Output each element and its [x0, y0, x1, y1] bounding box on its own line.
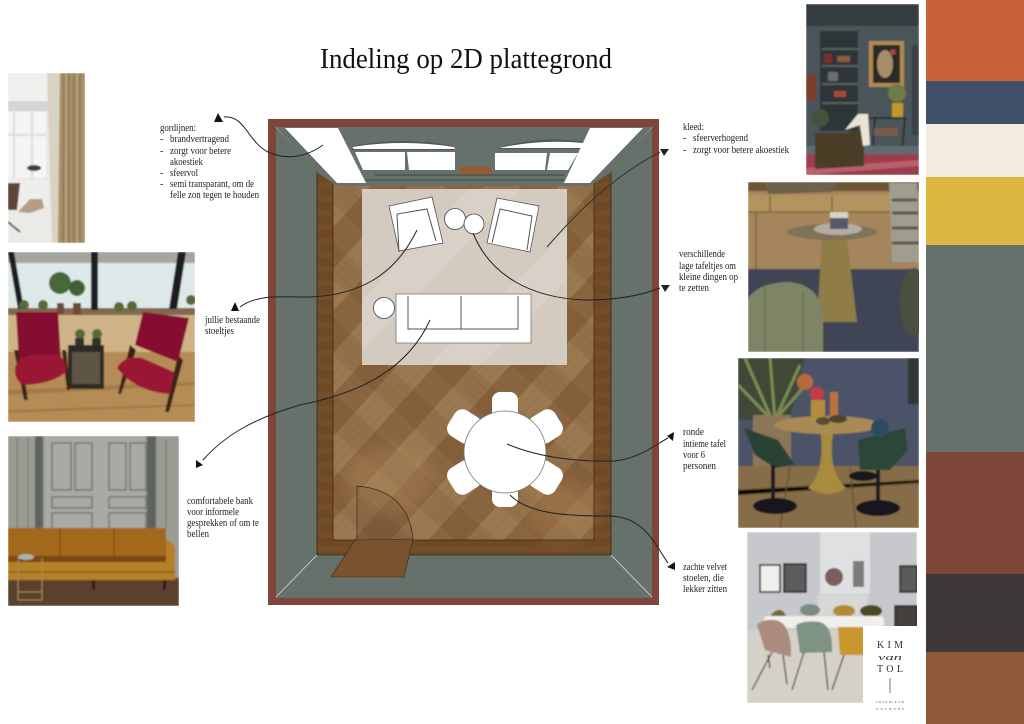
text: dining table: voor 6 — [683, 450, 705, 461]
rug — [362, 189, 567, 365]
logo: Kim van Tol: ONTWERP — [876, 707, 904, 711]
logo: Kim van Tol: INTERIEUR — [876, 700, 905, 704]
text: low tables: kleine dingen op — [679, 272, 738, 283]
arrow: rug — [547, 149, 669, 247]
arrow: velvet chairs — [510, 495, 675, 570]
text: low tables: te zetten — [679, 283, 709, 294]
text: curtains: zorgt voor betere — [170, 146, 231, 157]
door threshold — [331, 539, 413, 577]
logo: Kim van Tol: van — [878, 653, 902, 662]
title: Indeling op 2D plattegrond — [320, 43, 612, 75]
text: curtains: - — [160, 168, 163, 179]
text: dining table: intieme tafel — [683, 439, 726, 450]
text: armchairs — [204, 315, 260, 337]
text: dining table — [683, 427, 726, 472]
floor plan — [268, 119, 659, 605]
text: curtains: sfeervol — [170, 168, 198, 179]
text: low tables — [679, 249, 738, 294]
text: curtains — [160, 123, 259, 201]
text: curtains: - — [160, 134, 163, 145]
arrow: low tables — [473, 233, 670, 300]
logo: Kim van Tol: KIM — [877, 640, 903, 651]
text: velvet chairs: stoelen, die — [683, 573, 725, 584]
text: rug: kleed: — [683, 122, 704, 133]
walls — [276, 127, 652, 598]
curtain right — [564, 128, 643, 183]
text: rug: - — [683, 145, 686, 156]
photo: red armchairs — [8, 252, 195, 422]
text: low tables: lage tafeltjes om — [679, 261, 736, 272]
room outer wall border — [268, 119, 659, 605]
logo: Kim van Tol: TOL — [877, 664, 903, 675]
text: rug: - — [683, 133, 686, 144]
text: sofa: gesprekken of om te — [187, 518, 259, 529]
photo: side table — [748, 182, 919, 352]
text: curtains: - — [160, 179, 163, 190]
text: curtains: brandvertragend — [170, 134, 229, 145]
text: rug: sfeerverhogend — [693, 133, 748, 144]
arrow: curtains — [214, 113, 323, 157]
photo: curtains — [8, 73, 85, 243]
text: velvet chairs — [683, 562, 727, 595]
dining table with six chairs — [444, 392, 566, 507]
text: sofa: comfortabele bank — [187, 496, 253, 507]
sofa — [396, 294, 531, 343]
text: sofa: voor informele — [187, 507, 239, 518]
text: curtains: gordijnen: — [160, 123, 196, 134]
side tables — [374, 208, 484, 318]
wood floor with baseboards — [317, 168, 611, 555]
text: sofa — [187, 496, 259, 540]
panel: colour palette — [926, 0, 1024, 724]
text: curtains: - — [160, 146, 163, 157]
text: curtains: felle zon tegen te houden — [170, 190, 259, 201]
arrow: armchairs — [231, 230, 417, 311]
text: low tables: verschillende — [679, 249, 725, 260]
armchair left — [389, 197, 443, 252]
text: curtains: akoestiek — [170, 157, 203, 168]
door swing — [357, 486, 413, 540]
photo: velvet dining chairs — [747, 532, 917, 703]
curtain left — [285, 128, 366, 183]
back wall with windows — [276, 127, 652, 186]
photo: velvet sofa — [8, 436, 179, 606]
text: dining table: personen — [683, 461, 716, 472]
text: curtains: semi transparant, om de — [170, 179, 254, 190]
wall corner lines — [276, 127, 652, 597]
text: velvet chairs: zachte velvet — [683, 562, 727, 573]
text: armchairs: stoeltjes — [205, 326, 234, 337]
photo: round dining table — [738, 358, 919, 528]
armchair right — [487, 198, 539, 252]
arrow: dining table — [507, 432, 674, 461]
logo: Kim van Tol — [863, 626, 917, 713]
text: velvet chairs: lekker zitten — [683, 584, 727, 595]
photo: dark green living room — [806, 4, 919, 175]
text: rug — [683, 122, 789, 156]
arrow: sofa — [196, 320, 430, 468]
text: dining table: ronde — [683, 427, 705, 438]
text: sofa: bellen — [187, 529, 209, 540]
text: rug: zorgt voor betere akoestiek — [693, 145, 789, 156]
text: armchairs: jullie bestaande — [204, 315, 260, 326]
